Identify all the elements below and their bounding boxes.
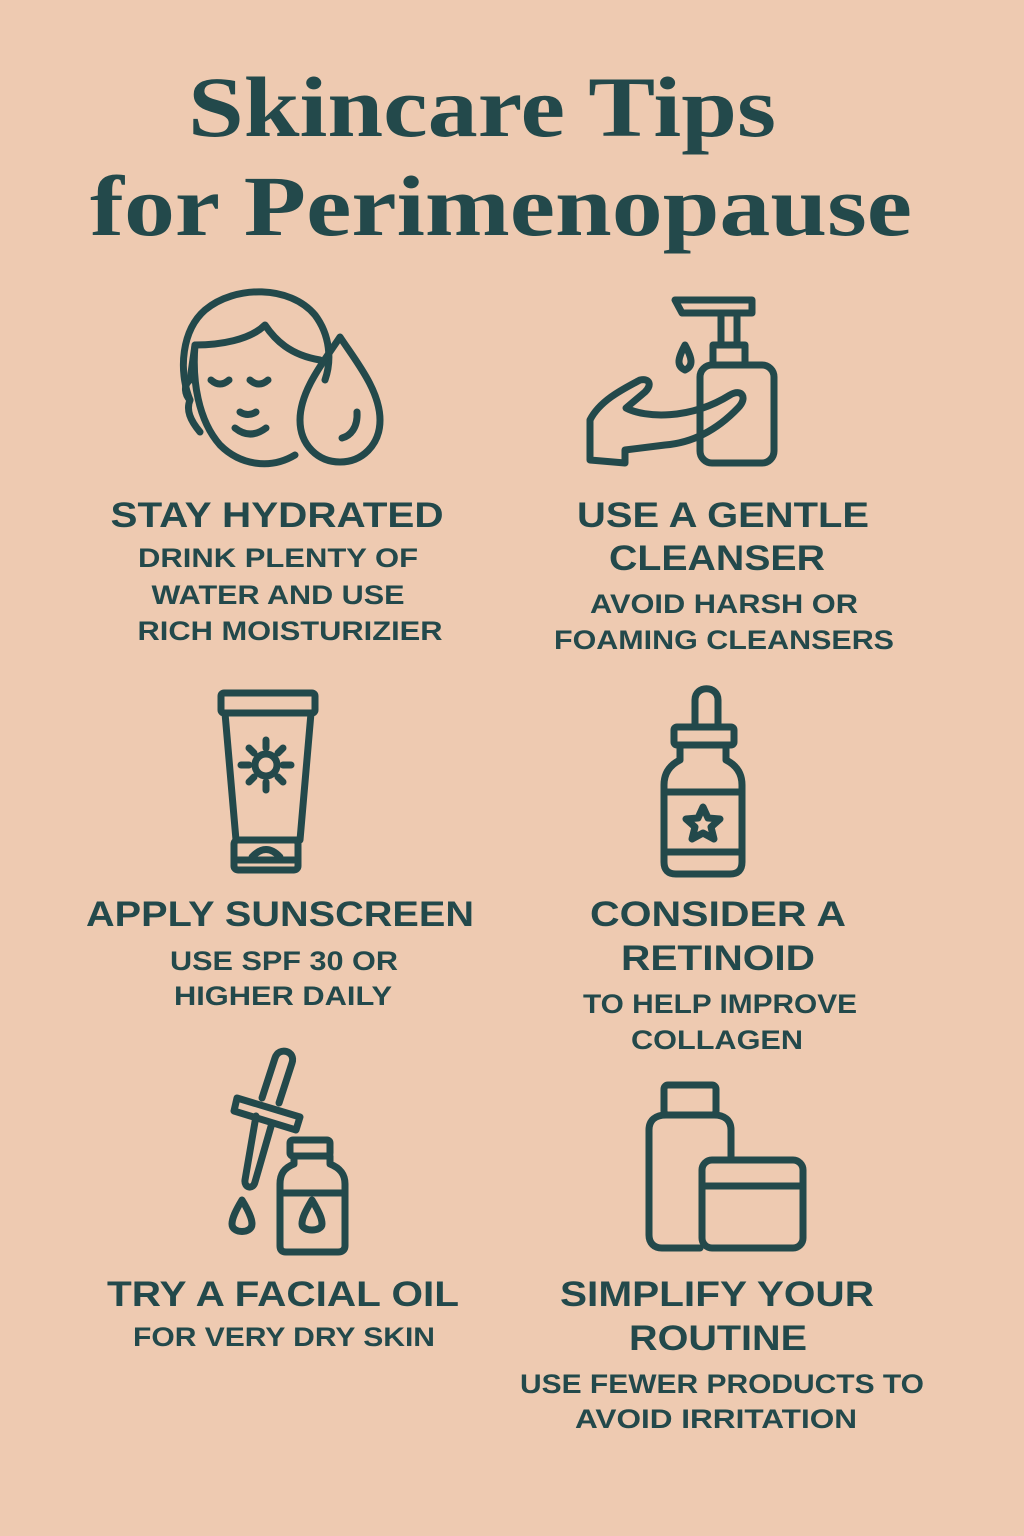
heading: apply sunscreen: USE SPF 30 OR bbox=[170, 946, 398, 976]
heading: facial oil: FOR VERY DRY SKIN bbox=[133, 1322, 435, 1352]
heading: facial oil: TRY A FACIAL OIL bbox=[107, 1275, 459, 1314]
heading: stay hydrated: WATER AND USE bbox=[152, 580, 404, 610]
heading: consider a retinoid: RETINOID bbox=[621, 939, 815, 978]
heading: apply sunscreen: HIGHER DAILY bbox=[174, 981, 392, 1011]
heading: simplify routine: AVOID IRRITATION bbox=[575, 1404, 857, 1434]
heading: simplify routine: SIMPLIFY YOUR bbox=[560, 1275, 874, 1314]
heading: consider a retinoid: TO HELP IMPROVE bbox=[583, 989, 857, 1019]
title: Skincare Tips bbox=[188, 59, 776, 155]
heading: stay hydrated: RICH MOISTURIZIER bbox=[138, 616, 442, 646]
heading: consider a retinoid: COLLAGEN bbox=[631, 1025, 803, 1055]
heading: stay hydrated: DRINK PLENTY OF bbox=[138, 543, 418, 573]
heading: stay hydrated bbox=[110, 496, 444, 646]
title: for Perimenopause bbox=[90, 158, 912, 254]
heading: gentle cleanser bbox=[554, 496, 894, 655]
icon: pump bottle with hand bbox=[590, 300, 774, 463]
heading: stay hydrated: STAY HYDRATED bbox=[110, 496, 444, 535]
icon: bottle and jar bbox=[649, 1085, 803, 1248]
heading: simplify routine bbox=[520, 1275, 924, 1434]
heading: simplify routine: ROUTINE bbox=[629, 1319, 807, 1358]
icon: sunscreen tube bbox=[221, 693, 315, 870]
heading: gentle cleanser: USE A GENTLE bbox=[577, 496, 869, 535]
icon: retinoid dropper bottle bbox=[664, 689, 742, 874]
heading: gentle cleanser: FOAMING CLEANSERS bbox=[554, 625, 894, 655]
heading: consider a retinoid bbox=[583, 895, 857, 1055]
heading: gentle cleanser: AVOID HARSH OR bbox=[590, 589, 858, 619]
heading: gentle cleanser: CLEANSER bbox=[609, 539, 825, 578]
icon: facial oil dropper bbox=[232, 1051, 345, 1252]
heading: simplify routine: USE FEWER PRODUCTS TO bbox=[520, 1369, 924, 1399]
heading: consider a retinoid: CONSIDER A bbox=[590, 895, 846, 934]
heading: apply sunscreen: APPLY SUNSCREEN bbox=[86, 895, 474, 934]
icon: face with water drop bbox=[183, 292, 380, 464]
heading: apply sunscreen bbox=[86, 895, 474, 1011]
heading: facial oil bbox=[107, 1275, 459, 1352]
title bbox=[90, 59, 912, 254]
